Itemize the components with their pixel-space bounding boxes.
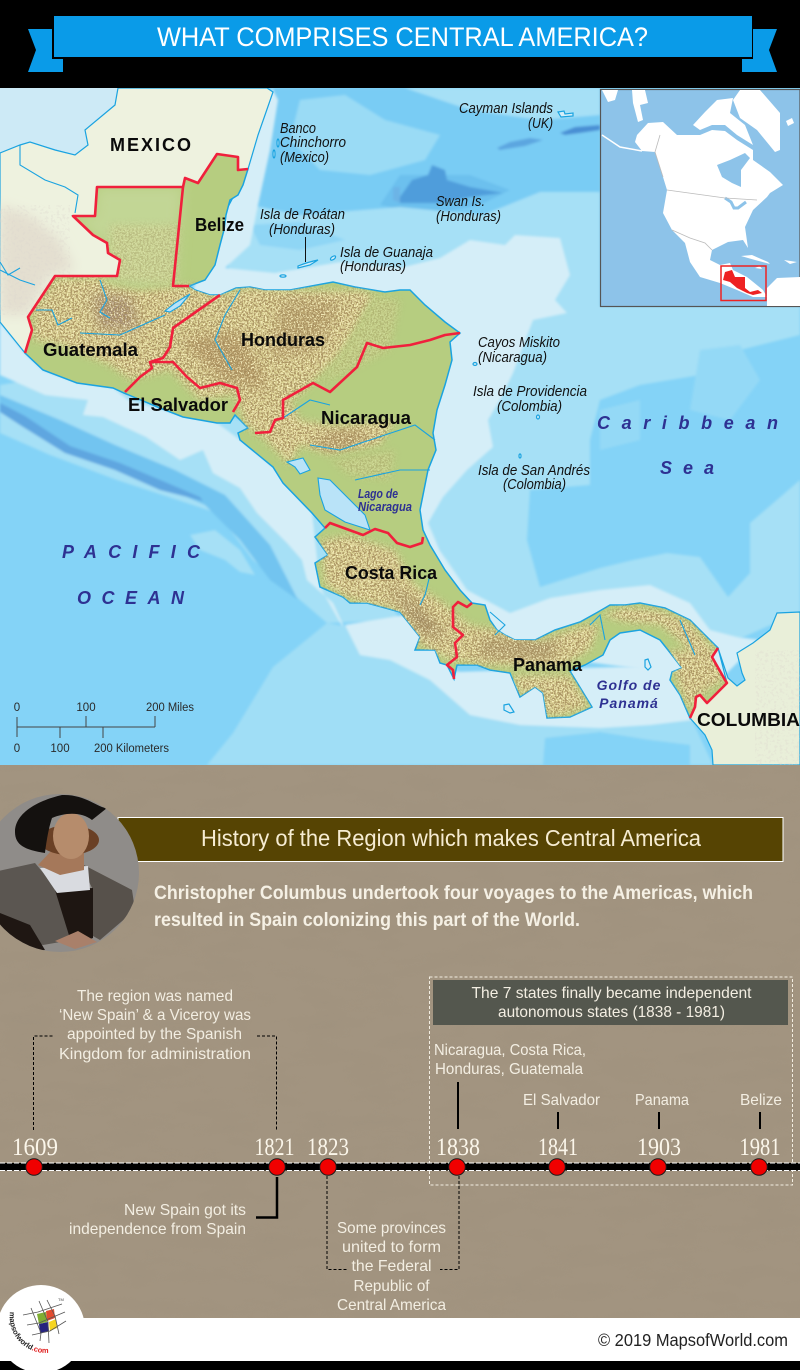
island labels: (Colombia) [497,398,562,415]
island labels: Cayman Islands [459,100,553,117]
country labels: Guatemala [43,340,139,360]
independence heading box [433,980,788,1025]
title banner [28,16,777,72]
map panel [0,88,800,765]
country labels: Costa Rica [345,563,438,583]
event callout 1609-1821: The region was named [77,988,233,1005]
event callout 1823-1838: united to form [342,1239,441,1256]
map scale bar: 0 [14,702,20,714]
event callout 1609-1821: ‘New Spain’ & a Viceroy was [59,1007,251,1024]
country labels: El Salvador [128,395,228,415]
country labels: Panama [513,655,583,675]
year labels: 1823 [307,1134,349,1161]
water labels: Sea [660,458,714,478]
event callout 1609-1821 [34,988,276,1130]
water labels [62,413,778,711]
parchment history panel [0,765,800,1318]
country labels: Nicaragua [321,408,412,428]
banner bar [54,16,752,57]
year labels: 1821 [254,1134,294,1161]
cloak [0,863,72,945]
history heading bar [118,818,783,862]
map scale bar: 200 Miles [146,702,194,714]
island labels: (Honduras) [269,221,335,238]
locator inset map [600,90,800,306]
water labels: Caribbean [597,413,778,433]
mountain highlands [30,223,725,718]
country borders [25,154,727,718]
year labels: 1841 [538,1134,578,1161]
island labels: Isla de Roátan [260,206,345,223]
country labels: COLUMBIA [697,710,800,730]
event callout 1821: New Spain got its [124,1202,246,1219]
shirt [40,866,90,893]
event callout 1609-1821: Kingdom for administration [59,1046,251,1063]
independence labels: Honduras, Guatemala [435,1061,583,1078]
northwest gulf water [0,88,120,155]
island labels: Swan Is. [436,193,485,210]
lakes and rivers [0,145,695,655]
island labels: (Mexico) [280,149,329,166]
year labels: 1981 [740,1134,780,1161]
island labels: Banco [280,120,316,137]
left ribbon tail [28,29,63,72]
independence heading box: The 7 states finally became independent [472,985,752,1002]
mexico highland texture [0,205,75,315]
event callout 1823-1838: Some provinces [337,1220,446,1237]
intro paragraph: resulted in Spain colonizing this part of the World. [154,909,580,931]
country labels: Belize [195,215,244,235]
event callout 1821: independence from Spain [69,1221,246,1238]
event callout 1823-1838: Republic of [354,1278,430,1295]
caribbean coastal shelf [190,88,760,680]
map scale bar [14,702,194,755]
year labels: 1903 [637,1134,681,1161]
map scale bar: 200 Kilometers [94,743,169,755]
water labels: OCEAN [77,588,185,608]
event callout 1823-1838 [327,1176,459,1314]
island labels: (Colombia) [503,476,566,493]
portrait of Christopher Columbus [0,794,140,955]
year labels [12,1134,780,1161]
logo: mapsofworld.com [8,1312,48,1353]
logo [0,1285,84,1370]
event callout 1823-1838: the Federal [352,1258,432,1275]
pacific depth layers [0,322,713,765]
year labels: 1838 [436,1134,480,1161]
event callout 1823-1838: Central America [337,1297,446,1314]
event callout 1609-1821: appointed by the Spanish [67,1026,242,1043]
neck, hair and face [38,850,84,875]
water labels: Lago de [358,487,398,501]
island labels: (Honduras) [436,208,501,225]
water labels: Panamá [599,695,659,711]
independence labels: El Salvador [523,1092,601,1109]
island labels [260,100,590,493]
inset lakes and borders [655,135,757,250]
island labels: Isla de Providencia [473,383,587,400]
map scale bar: 100 [76,702,96,714]
caribbean depth layers [225,88,800,640]
intro paragraph [154,882,753,931]
island labels: Isla de Guanaja [340,244,433,261]
independence labels: Nicaragua, Costa Rica, [434,1042,586,1059]
island labels: (UK) [528,115,553,132]
title: WHAT COMPRISES CENTRAL AMERICA? [157,22,648,52]
water labels: Nicaragua [358,500,412,514]
independence heading box: autonomous states (1838 - 1981) [498,1004,725,1021]
independence highlight box [430,977,792,1185]
peten lowland [73,187,183,286]
logo: TM [58,1297,64,1302]
mexico land [0,88,273,353]
central america land [24,155,726,720]
independence labels: Panama [635,1092,689,1109]
independence labels [434,1042,782,1129]
country labels: MEXICO [110,135,194,155]
history heading bar: History of the Region which makes Central America [201,825,701,851]
footer band [0,1318,800,1361]
timeline [0,977,800,1314]
island labels: Isla de San Andrés [478,462,590,479]
map scale bar: 100 [50,743,70,755]
country labels [43,135,800,730]
map scale bar: 0 [14,743,20,755]
water labels: PACIFIC [62,542,201,562]
hand [55,931,97,949]
island labels: (Honduras) [340,258,406,275]
island labels: (Nicaragua) [478,349,547,366]
event callout 1821 [69,1177,277,1238]
right ribbon tail [742,29,777,72]
axis rail [0,1163,800,1170]
island labels: Cayos Miskito [478,334,560,351]
island labels: Chinchorro [280,134,346,151]
water labels: Golfo de [597,677,661,693]
timeline nodes [26,1159,767,1175]
intro paragraph: Christopher Columbus undertook four voyages to the Americas, which [154,882,753,904]
independence labels: Belize [740,1092,782,1109]
colombia land [690,612,800,765]
hat [15,795,107,853]
islands [273,111,651,713]
country labels: Honduras [241,330,325,350]
year labels: 1609 [12,1134,58,1161]
copyright: © 2019 MapsofWorld.com [598,1330,788,1350]
